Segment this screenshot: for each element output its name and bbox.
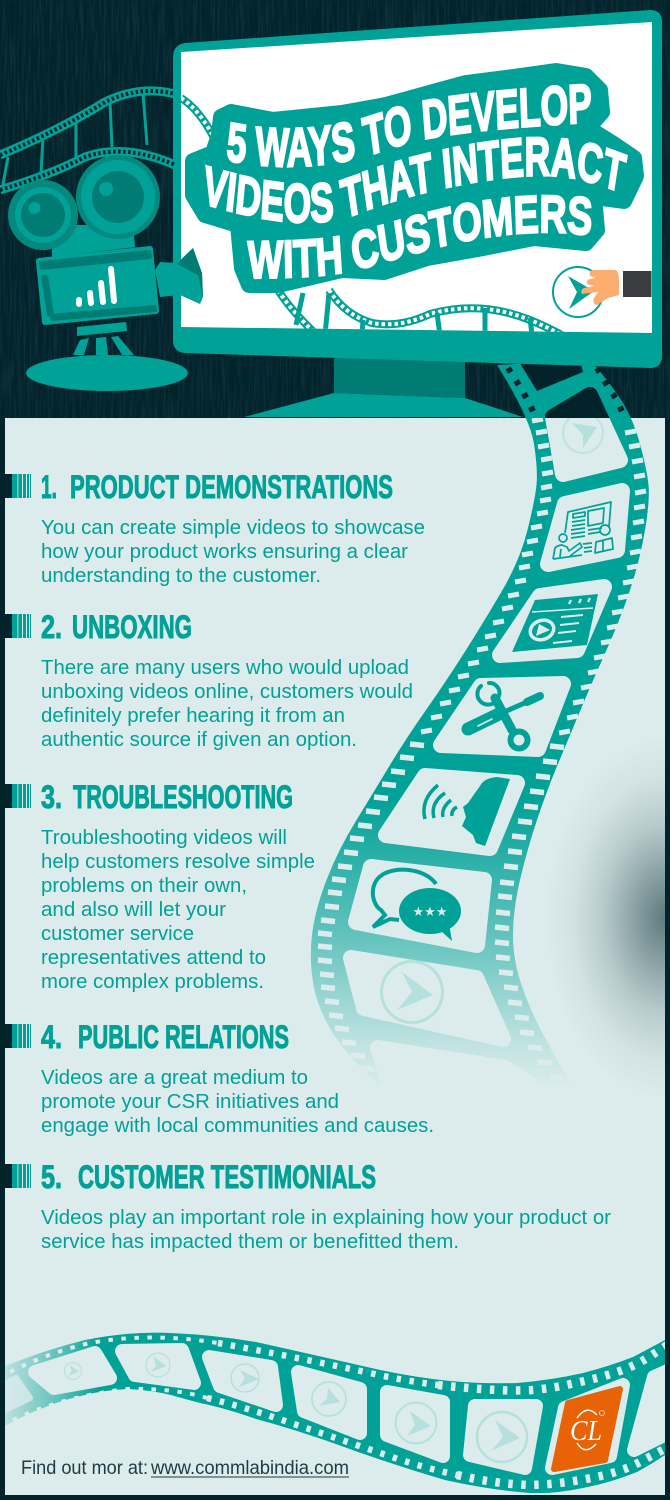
body text bbox=[41, 1206, 611, 1253]
heading marker bbox=[5, 1024, 31, 1048]
heading marker bbox=[5, 784, 31, 808]
film perforations on dark area bbox=[506, 366, 624, 412]
heading marker bbox=[5, 474, 31, 498]
body text: unboxing videos online, customers would bbox=[41, 680, 413, 703]
heading bbox=[41, 779, 293, 815]
body text: customer service bbox=[41, 922, 194, 945]
heading bbox=[41, 1019, 289, 1055]
body text: Videos play an important role in explaining how your product or bbox=[41, 1206, 611, 1229]
body text: how your product works ensuring a clear bbox=[41, 540, 408, 563]
camera body bbox=[39, 249, 156, 322]
soft shadow on panel right bbox=[545, 734, 665, 1102]
arrow icon 6 bbox=[477, 1412, 527, 1462]
heading: PUBLIC RELATIONS bbox=[78, 1019, 289, 1055]
heading bbox=[41, 469, 393, 505]
icon: video player bbox=[512, 594, 598, 652]
title line 1: 5 WAYS TO DEVELOP bbox=[226, 84, 592, 168]
body text: authentic source if given an option. bbox=[41, 728, 357, 751]
camera neck bbox=[52, 225, 135, 257]
film strip from camera bbox=[0, 91, 175, 190]
body text: definitely prefer hearing it from an bbox=[41, 704, 345, 727]
title banner bbox=[185, 63, 644, 293]
heading marker bbox=[5, 1164, 31, 1188]
heading: 3. bbox=[41, 779, 62, 815]
bottom strip frames bbox=[5, 1350, 670, 1468]
content panel bbox=[5, 418, 665, 1495]
footer link text: www.commlabindia.com bbox=[150, 1457, 349, 1479]
film perforations on panel bbox=[318, 419, 646, 1078]
body text: engage with local communities and causes. bbox=[41, 1114, 434, 1137]
section 1 bbox=[5, 469, 425, 587]
title line 2: VIDEOS THAT INTERACT bbox=[205, 136, 628, 224]
title line 3: WITH CUSTOMERS bbox=[246, 194, 592, 280]
heading: PRODUCT DEMONSTRATIONS bbox=[70, 469, 393, 505]
arrow icon 1 bbox=[64, 1362, 82, 1380]
icon: hand pressing arrow button bbox=[553, 267, 652, 317]
section 2 bbox=[5, 609, 413, 751]
body text: problems on their own, bbox=[41, 874, 247, 897]
body text: understanding to the customer. bbox=[41, 564, 321, 587]
heading: TROUBLESHOOTING bbox=[73, 779, 293, 815]
body text: service has impacted them or benefitted them. bbox=[41, 1230, 459, 1253]
heading: 1. bbox=[41, 469, 57, 505]
section 5 bbox=[5, 1159, 611, 1253]
footer link text: Find out mor at: bbox=[21, 1457, 148, 1479]
monitor stand bbox=[244, 358, 523, 417]
camera tripod bbox=[26, 322, 188, 391]
body text: more complex problems. bbox=[41, 970, 264, 993]
icon: arrow circle top frame bbox=[563, 413, 603, 453]
bottom strip perforations bbox=[10, 1338, 670, 1485]
body text bbox=[41, 656, 413, 751]
body text: There are many users who would upload bbox=[41, 656, 409, 679]
heading: 4. bbox=[41, 1019, 62, 1055]
film strip seen on the screen bbox=[181, 98, 580, 345]
section 4 bbox=[5, 1019, 434, 1137]
heading marker bbox=[5, 614, 31, 638]
icon: chat bubbles with stars: ★★★ bbox=[413, 905, 447, 920]
section 3 bbox=[5, 779, 315, 993]
icon: fading arrow circle bbox=[382, 962, 442, 1022]
body text bbox=[41, 516, 425, 587]
wavy banner shape bbox=[193, 71, 636, 285]
body text: promote your CSR initiatives and bbox=[41, 1090, 339, 1113]
body text bbox=[41, 826, 315, 993]
body text bbox=[41, 1066, 434, 1137]
arrow icon 5 bbox=[396, 1402, 436, 1444]
heading: 5. bbox=[41, 1159, 62, 1195]
body text: representatives attend to bbox=[41, 946, 266, 969]
footer link text bbox=[21, 1457, 349, 1479]
body text: Videos are a great medium to bbox=[41, 1066, 308, 1089]
body text: and also will let your bbox=[41, 898, 226, 921]
body text: help customers resolve simple bbox=[41, 850, 315, 873]
heading: 2. bbox=[41, 609, 62, 645]
icon: speaking head bbox=[424, 777, 510, 846]
main film strip bbox=[311, 360, 649, 1115]
bottom film strip bbox=[5, 1333, 670, 1493]
arrow icon 4 bbox=[312, 1382, 346, 1416]
heading bbox=[41, 1159, 376, 1195]
film camera bbox=[8, 155, 203, 391]
logo: CommLab orange tile: CL bbox=[570, 1416, 602, 1447]
film frame cutouts bbox=[351, 360, 622, 1115]
heading bbox=[41, 609, 192, 645]
camera reels bbox=[8, 155, 160, 250]
camera lens bbox=[155, 248, 203, 304]
icon: presenter document bbox=[553, 502, 613, 559]
monitor bbox=[173, 10, 662, 368]
icon: wrench and screwdriver bbox=[468, 683, 540, 748]
arrow icon 2 bbox=[146, 1353, 170, 1377]
body text: Troubleshooting videos will bbox=[41, 826, 287, 849]
body text: You can create simple videos to showcase bbox=[41, 516, 425, 539]
heading: CUSTOMER TESTIMONIALS bbox=[78, 1159, 376, 1195]
logo: CommLab orange tile bbox=[554, 1389, 620, 1469]
icon: chat bubbles with stars bbox=[373, 870, 461, 941]
arrow icon 3 bbox=[231, 1364, 259, 1392]
heading: UNBOXING bbox=[72, 609, 192, 645]
